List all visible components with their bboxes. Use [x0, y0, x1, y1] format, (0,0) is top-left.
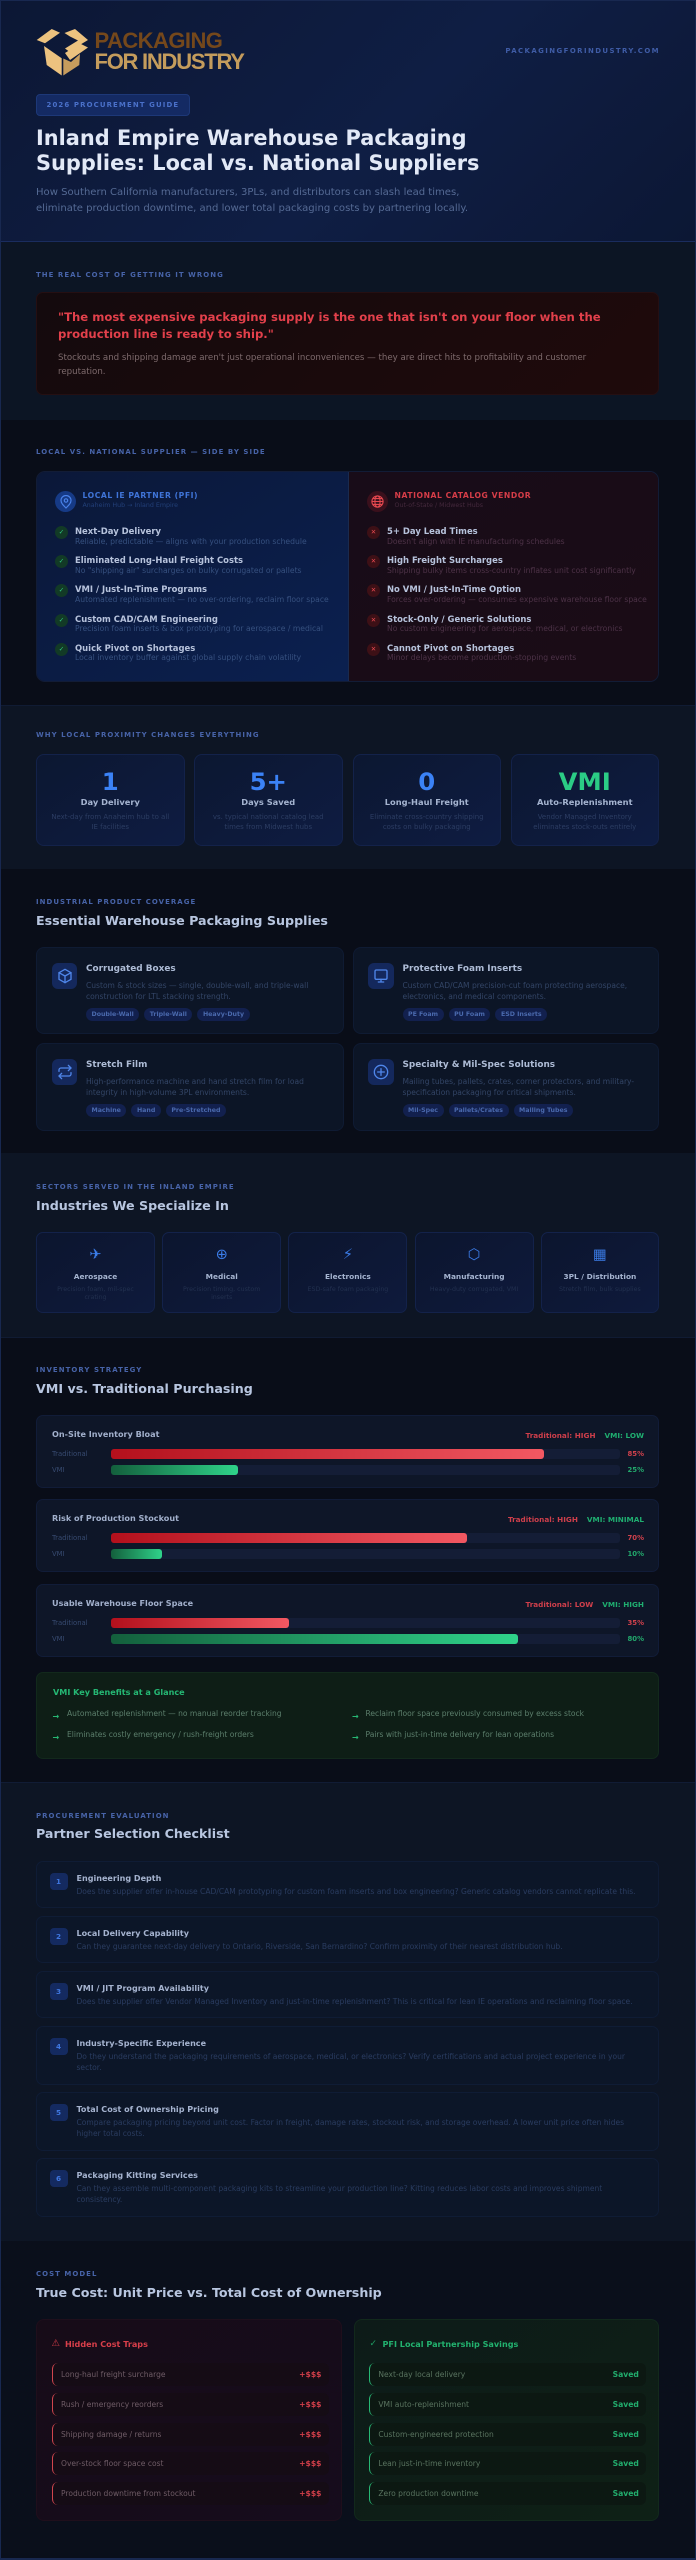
cost row: Shipping damage / returns	[61, 2430, 162, 2438]
stat card: VMI: Vendor Managed Inventory	[538, 813, 632, 821]
checklist item 1: Does the supplier offer in-house CAD/CAM prototyping for custom foam inserts and box engineering? Generic catalog vendors cannot replicate this.	[76, 1887, 636, 1896]
savings row: Next-day local delivery	[378, 2370, 465, 2378]
section: real cost	[0, 242, 696, 420]
section label: WHY LOCAL PROXIMITY CHANGES EVERYTHING	[36, 730, 260, 738]
stat card: VMI: eliminates stock-outs entirely	[533, 823, 636, 831]
product card: specialty	[352, 1043, 659, 1131]
sector card: medical: Precision timing, custom	[183, 1286, 260, 1292]
sector card: aerospace: crating	[84, 1294, 107, 1301]
icon: monitor	[368, 963, 394, 989]
local row 1: ✓	[59, 528, 64, 536]
bar chart: production stockout risk: 10%	[628, 1550, 644, 1558]
product card: specialty: Mailing Tubes	[519, 1107, 567, 1114]
stat card: 5+ days	[194, 754, 342, 846]
sector card: 3PL: ▦	[593, 1246, 607, 1263]
section label: INDUSTRIAL PRODUCT COVERAGE	[36, 898, 196, 906]
cost row: Over-stock floor space cost	[61, 2458, 164, 2468]
savings row: Saved	[613, 2370, 639, 2378]
stat card: VMI	[510, 754, 659, 846]
checklist item 5: Compare packaging pricing beyond unit cost. Factor in freight, damage rates, stockout risk, and storage overhead. A lower unit price often hides	[76, 2118, 624, 2127]
savings row: Lean just-in-time inventory	[378, 2458, 480, 2468]
cost row	[52, 2363, 329, 2386]
local row 4: ✓	[59, 616, 64, 624]
bar chart: on-site inventory bloat: Traditional: HIGH VMI: LOW	[526, 1431, 644, 1440]
guide badge	[36, 94, 190, 116]
stat card: 0 freight: Long-Haul Freight	[385, 797, 469, 807]
cost row: Production downtime from stockout	[61, 2488, 195, 2498]
checklist item 3: 3	[56, 1986, 61, 1996]
panel: local partner	[37, 472, 349, 681]
panel: VMI key benefits: Eliminates costly emergency / rush-freight orders	[67, 1730, 254, 1739]
local row 1: Next-Day Delivery	[75, 526, 161, 536]
section heading: Essential Warehouse Packaging Supplies	[36, 913, 328, 928]
sector card: 3PL: Stretch film, bulk supplies	[559, 1286, 641, 1292]
checklist item 5: Total Cost of Ownership Pricing	[76, 2104, 219, 2114]
national row 1	[367, 526, 565, 546]
subtitle	[36, 187, 468, 214]
national row 2: High Freight Surcharges	[387, 555, 503, 565]
bar chart: usable floor space	[36, 1584, 659, 1657]
sector card: electronics: Electronics	[325, 1272, 371, 1281]
savings row: Saved	[613, 2400, 639, 2408]
bar chart: usable floor space: VMI	[52, 1634, 65, 1642]
product card: stretch film: integrity in high-volume 3PL environments.	[86, 1088, 249, 1096]
checklist item 4	[36, 2026, 659, 2085]
icon: circled plus	[368, 1059, 394, 1085]
bar chart: usable floor space: Traditional	[52, 1619, 88, 1627]
checklist item 2: Can they guarantee next-day delivery to Ontario, Riverside, San Bernardino? Confirm proximity of their nearest distribution hub.	[76, 1942, 563, 1951]
section label: COST MODEL	[36, 2270, 97, 2278]
product card: foam inserts: PU Foam	[454, 1011, 485, 1018]
logo text: packaging: PACKAGING	[94, 28, 222, 53]
local row 2	[55, 555, 302, 575]
cost row: +$$$	[299, 2488, 322, 2498]
national row 4: Stock-Only / Generic Solutions	[387, 614, 531, 624]
section: true cost	[0, 2241, 696, 2560]
bar chart: usable floor space: 80%	[628, 1634, 644, 1642]
stat card: 0 freight: costs on bulky packaging	[383, 823, 471, 831]
checklist item 3: VMI / JIT Program Availability	[76, 1984, 209, 1992]
cost row	[52, 2423, 329, 2446]
sector card: manufacturing: Manufacturing	[444, 1272, 505, 1281]
checklist item 6: consistency.	[76, 2195, 122, 2204]
national row 3	[367, 584, 647, 604]
local row 1: Reliable, predictable — aligns with your production schedule	[75, 536, 307, 546]
national row 3: ✕	[371, 586, 376, 594]
title: Inland Empire Warehouse Packaging	[36, 126, 467, 150]
savings row: Saved	[613, 2488, 639, 2498]
icon: location pin	[55, 491, 76, 512]
product card: corrugated boxes: Triple-Wall	[150, 1011, 187, 1018]
sector card: aerospace: Aerospace	[74, 1272, 117, 1281]
cost row: +$$$	[299, 2400, 322, 2408]
product card: corrugated boxes	[36, 947, 344, 1034]
sector card: manufacturing: ⬡	[468, 1246, 480, 1263]
quote text: production line is ready to ship."	[58, 327, 274, 341]
stat card: 1 day: Day Delivery	[81, 797, 140, 807]
product card: corrugated boxes: Heavy-Duty	[203, 1011, 244, 1018]
local row 5: ✓	[59, 645, 64, 653]
sector card: electronics: ESD-safe foam packaging	[307, 1286, 388, 1292]
icon: repeat arrows	[52, 1059, 77, 1085]
national row 5: Cannot Pivot on Shortages	[387, 643, 514, 653]
product card: foam inserts: PE Foam	[408, 1011, 438, 1018]
quote supporting text: reputation.	[58, 366, 106, 376]
product card: foam inserts: Custom CAD/CAM precision-cut foam protecting aerospace,	[402, 980, 627, 990]
savings row: Saved	[613, 2458, 639, 2468]
savings row	[369, 2452, 646, 2475]
website url: PACKAGINGFORINDUSTRY.COM	[505, 47, 660, 55]
panel: VMI key benefits: VMI Key Benefits at a Glance	[53, 1687, 185, 1697]
comparison panel	[36, 471, 659, 682]
product card: stretch film: Hand	[137, 1107, 155, 1114]
panel: VMI key benefits: →	[352, 1712, 359, 1720]
savings row: Saved	[613, 2430, 639, 2438]
national row 1: ✕	[371, 528, 376, 536]
bar chart: production stockout risk	[36, 1499, 659, 1572]
local row 1	[55, 526, 307, 546]
national heading: NATIONAL CATALOG VENDOR	[394, 491, 531, 500]
savings row	[369, 2482, 646, 2505]
product card: corrugated boxes: Custom & stock sizes — single, double-wall, and triple-wall	[86, 980, 308, 990]
checklist item 1	[36, 1861, 659, 1908]
section: VMI vs traditional	[0, 1337, 696, 1782]
bar chart: usable floor space: Usable Warehouse Floor Space	[52, 1598, 193, 1608]
subtitle: How Southern California manufacturers, 3PLs, and distributors can slash lead times,	[36, 187, 459, 198]
checklist item 4: sector.	[76, 2063, 102, 2072]
bar chart: production stockout risk: Risk of Production Stockout	[52, 1513, 179, 1523]
sector card: electronics	[288, 1232, 407, 1313]
stat card: VMI: VMI	[559, 767, 611, 796]
stat card: 1 day: IE facilities	[91, 823, 129, 831]
savings row	[369, 2363, 646, 2386]
national row 4: No custom engineering for aerospace, medical, or electronics	[387, 624, 623, 633]
checklist item 1: 1	[56, 1876, 61, 1886]
checklist item 4: 4	[56, 2042, 61, 2050]
bar chart: on-site inventory bloat: 25%	[628, 1466, 644, 1474]
stat card: 1 day	[36, 754, 184, 846]
checklist item 5: higher total costs.	[76, 2129, 145, 2138]
quote supporting text	[58, 352, 586, 376]
icon: globe	[367, 491, 388, 512]
local row 3: Automated replenishment — no over-ordering, reclaim floor space	[75, 595, 329, 604]
savings row	[369, 2423, 646, 2446]
national row 2	[367, 555, 636, 575]
panel: hidden cost traps: Hidden Cost Traps	[65, 2339, 148, 2349]
section label: LOCAL VS. NATIONAL SUPPLIER — SIDE BY SIDE	[36, 448, 266, 456]
bar chart: on-site inventory bloat: VMI	[52, 1466, 65, 1474]
product card: corrugated boxes: construction for LTL stacking strength.	[86, 992, 231, 1000]
checklist item 2	[36, 1916, 659, 1963]
cost row	[52, 2482, 329, 2505]
sector card: manufacturing	[415, 1232, 534, 1313]
quote text: "The most expensive packaging supply is the one that isn't on your floor when the	[58, 310, 601, 324]
national row 2: ✕	[371, 557, 376, 565]
section heading: VMI vs. Traditional Purchasing	[36, 1381, 253, 1396]
subtitle: eliminate production downtime, and lower total packaging costs by partnering locally.	[36, 203, 468, 214]
local row 2: No "shipping air" surcharges on bulky corrugated or pallets	[75, 566, 302, 575]
product card: stretch film: Stretch Film	[86, 1060, 147, 1070]
national row 5: ✕	[371, 645, 376, 653]
product card: specialty: Pallets/Crates	[454, 1107, 503, 1114]
checklist item 1: Engineering Depth	[76, 1874, 161, 1882]
stat card: 5+ days: times from Midwest hubs	[224, 823, 312, 831]
cost row: +$$$	[299, 2370, 322, 2378]
product card: specialty: Mailing tubes, pallets, crates, corner protectors, and military-	[402, 1076, 634, 1086]
cost row: +$$$	[299, 2458, 322, 2468]
cost row: Long-haul freight surcharge	[61, 2370, 166, 2378]
local row 4: Precision foam inserts & box prototyping for aerospace / medical	[75, 624, 323, 633]
local row 3	[55, 584, 329, 604]
panel: VMI key benefits: Automated replenishment — no manual reorder tracking	[67, 1709, 282, 1718]
savings row: VMI auto-replenishment	[378, 2400, 469, 2408]
cost row	[52, 2452, 329, 2475]
section label: THE REAL COST OF GETTING IT WRONG	[36, 271, 224, 279]
national subheading: Out-of-State / Midwest Hubs	[394, 502, 483, 509]
bar chart: production stockout risk: Traditional	[52, 1534, 88, 1542]
national row 1: Doesn't align with IE manufacturing schedules	[387, 536, 565, 546]
sector card: electronics: ⚡	[343, 1246, 353, 1263]
panel: VMI key benefits: →	[352, 1732, 359, 1742]
section heading: Partner Selection Checklist	[36, 1826, 230, 1841]
product card: stretch film: High-performance machine and hand stretch film for load	[86, 1076, 304, 1086]
product card: specialty: Mil-Spec	[408, 1107, 438, 1114]
sector card: medical: ⊕	[216, 1246, 228, 1263]
national row 4: ✕	[371, 616, 376, 624]
panel: hidden cost traps: ⚠	[52, 2338, 60, 2349]
sector card: aerospace	[36, 1232, 155, 1313]
stat card: 0 freight: Eliminate cross-country shipping	[370, 813, 484, 821]
national row 2: Shipping bulky items cross-country inflates unit cost significantly	[387, 566, 636, 575]
section: partner checklist	[0, 1782, 696, 2241]
bar chart: production stockout risk: VMI	[52, 1550, 65, 1558]
panel: VMI key benefits: Pairs with just-in-time delivery for lean operations	[366, 1730, 554, 1739]
checklist item 5: 5	[56, 2108, 61, 2116]
stat card: 0 freight: 0	[418, 767, 435, 796]
checklist item 5	[36, 2092, 659, 2151]
section heading: Industries We Specialize In	[36, 1198, 229, 1213]
quote supporting text: Stockouts and shipping damage aren't just operational inconveniences — they are direct hits to profitability and customer	[58, 352, 586, 362]
bar chart: on-site inventory bloat: On-Site Inventory Bloat	[52, 1429, 159, 1439]
logo	[36, 28, 244, 76]
guide badge: 2026 PROCUREMENT GUIDE	[46, 101, 179, 109]
panel: PFI savings: PFI Local Partnership Savings	[382, 2339, 518, 2349]
national row 3: No VMI / Just-In-Time Option	[387, 584, 521, 594]
national row 3: Forces over-ordering — consumes expensive warehouse floor space	[387, 595, 647, 604]
product card: stretch film: Machine	[92, 1107, 121, 1114]
panel: PFI savings	[354, 2319, 659, 2521]
sector card: medical	[162, 1232, 281, 1313]
product card: specialty: specification packaging for critical shipments.	[402, 1088, 576, 1096]
product card: foam inserts: electronics, and medical components.	[402, 992, 546, 1000]
checklist item 2: Local Delivery Capability	[76, 1928, 189, 1938]
local heading: LOCAL IE PARTNER (PFI)	[82, 491, 198, 500]
section: product coverage	[0, 869, 696, 1153]
quote text	[58, 310, 601, 341]
checklist item 4: Do they understand the packaging requirements of aerospace, medical, or electronics? Verify certifications and actual project experience in your	[76, 2052, 625, 2061]
section: industries	[0, 1153, 696, 1337]
panel: VMI key benefits: Reclaim floor space previously consumed by excess stock	[366, 1709, 584, 1718]
section: side by side comparison	[0, 420, 696, 705]
local row 4: Custom CAD/CAM Engineering	[75, 614, 218, 624]
product card: stretch film: Pre-Stretched	[171, 1107, 220, 1114]
section heading: True Cost: Unit Price vs. Total Cost of Ownership	[36, 2285, 382, 2300]
bar chart: production stockout risk: Traditional: HIGH VMI: MINIMAL	[508, 1515, 644, 1524]
stat card: VMI: Auto-Replenishment	[537, 797, 633, 807]
panel: national vendor	[349, 472, 660, 681]
local row 2: Eliminated Long-Haul Freight Costs	[75, 555, 243, 565]
product card: stretch film	[36, 1043, 344, 1131]
sector card: aerospace: Precision foam, mil-spec	[57, 1286, 134, 1292]
section label: INVENTORY STRATEGY	[36, 1366, 142, 1374]
checklist item 2: 2	[56, 1932, 61, 1940]
product card: specialty: Specialty & Mil-Spec Solutions	[402, 1060, 555, 1070]
sector card: 3PL	[541, 1232, 659, 1313]
national row 4	[367, 614, 623, 633]
stat card: 1 day: 1	[102, 767, 119, 796]
national row 1: 5+ Day Lead Times	[387, 526, 478, 536]
savings row: Zero production downtime	[378, 2488, 478, 2498]
product card: foam inserts: ESD Inserts	[501, 1011, 542, 1018]
section: local proximity stats	[0, 705, 696, 869]
product card: corrugated boxes: Corrugated Boxes	[86, 964, 176, 974]
checklist item 6: Packaging Kitting Services	[76, 2170, 198, 2180]
local subheading: Anaheim Hub → Inland Empire	[82, 502, 178, 509]
panel: PFI savings: ✓	[370, 2339, 377, 2349]
sector card: 3PL: 3PL / Distribution	[563, 1272, 636, 1281]
section label: SECTORS SERVED IN THE INLAND EMPIRE	[36, 1183, 235, 1191]
icon: cube	[52, 963, 77, 989]
bar chart: usable floor space: 35%	[628, 1619, 644, 1627]
bar chart: usable floor space: Traditional: LOW VMI: HIGH	[526, 1600, 644, 1609]
local row 5: Local inventory buffer against global supply chain volatility	[75, 653, 301, 662]
stat card: 5+ days: Days Saved	[241, 797, 295, 807]
checklist item 3: Does the supplier offer Vendor Managed Inventory and just-in-time replenishment? This is critical for lean IE operations and reclaiming floor space.	[76, 1997, 633, 2006]
stat card: 5+ days: vs. typical national catalog lead	[213, 813, 324, 821]
local row 3: VMI / Just-In-Time Programs	[75, 584, 207, 594]
stat card: 0 freight	[352, 754, 501, 846]
cost row: +$$$	[299, 2430, 322, 2438]
checklist item 6: Can they assemble multi-component packaging kits to streamline your production line? Kitting reduces labor costs and improves shipment	[76, 2184, 602, 2193]
cost row: Rush / emergency reorders	[61, 2400, 163, 2408]
panel: VMI key benefits: →	[52, 1732, 59, 1742]
cost row	[52, 2393, 329, 2416]
section label: PROCUREMENT EVALUATION	[36, 1812, 170, 1820]
local row 5	[55, 643, 301, 662]
sector card: aerospace: ✈	[89, 1246, 102, 1263]
local row 2: ✓	[59, 557, 64, 565]
national row 5: Minor delays become production-stopping events	[387, 653, 576, 662]
local row 4	[55, 614, 323, 633]
local row 3: ✓	[59, 586, 64, 594]
local row 5: Quick Pivot on Shortages	[75, 643, 195, 653]
checklist item 3	[36, 1971, 659, 2018]
panel: hidden cost traps	[36, 2319, 342, 2521]
bar chart: on-site inventory bloat: 85%	[628, 1450, 644, 1458]
title: Supplies: Local vs. National Suppliers	[36, 150, 479, 174]
checklist item 4: Industry-Specific Experience	[76, 2038, 206, 2048]
callout: quote	[36, 292, 659, 395]
panel: VMI key benefits: →	[52, 1712, 59, 1720]
product card: foam inserts: Protective Foam Inserts	[402, 964, 522, 974]
bar chart: production stockout risk: 70%	[628, 1534, 644, 1542]
savings row	[369, 2393, 646, 2416]
checklist item 6: 6	[56, 2174, 61, 2182]
icon: packaging box logo mark	[36, 29, 88, 76]
sector card: medical: Medical	[206, 1272, 238, 1281]
checklist item 6	[36, 2158, 659, 2217]
stat card: 1 day: Next-day from Anaheim hub to all	[51, 813, 169, 821]
stat card: 5+ days: 5+	[250, 767, 287, 796]
savings row: Custom-engineered protection	[378, 2430, 494, 2438]
bar chart: on-site inventory bloat	[36, 1415, 659, 1488]
product card: foam inserts	[352, 947, 659, 1034]
logo text: for industry: FOR INDUSTRY	[94, 48, 244, 74]
header panel	[0, 0, 696, 242]
panel: VMI key benefits	[36, 1672, 659, 1759]
bar chart: on-site inventory bloat: Traditional	[52, 1450, 88, 1458]
sector card: medical: inserts	[211, 1294, 232, 1301]
product card: corrugated boxes: Double-Wall	[92, 1011, 134, 1018]
sector card: manufacturing: Heavy-duty corrugated, VMI	[430, 1286, 518, 1292]
national row 5	[367, 643, 576, 662]
title	[36, 126, 479, 174]
